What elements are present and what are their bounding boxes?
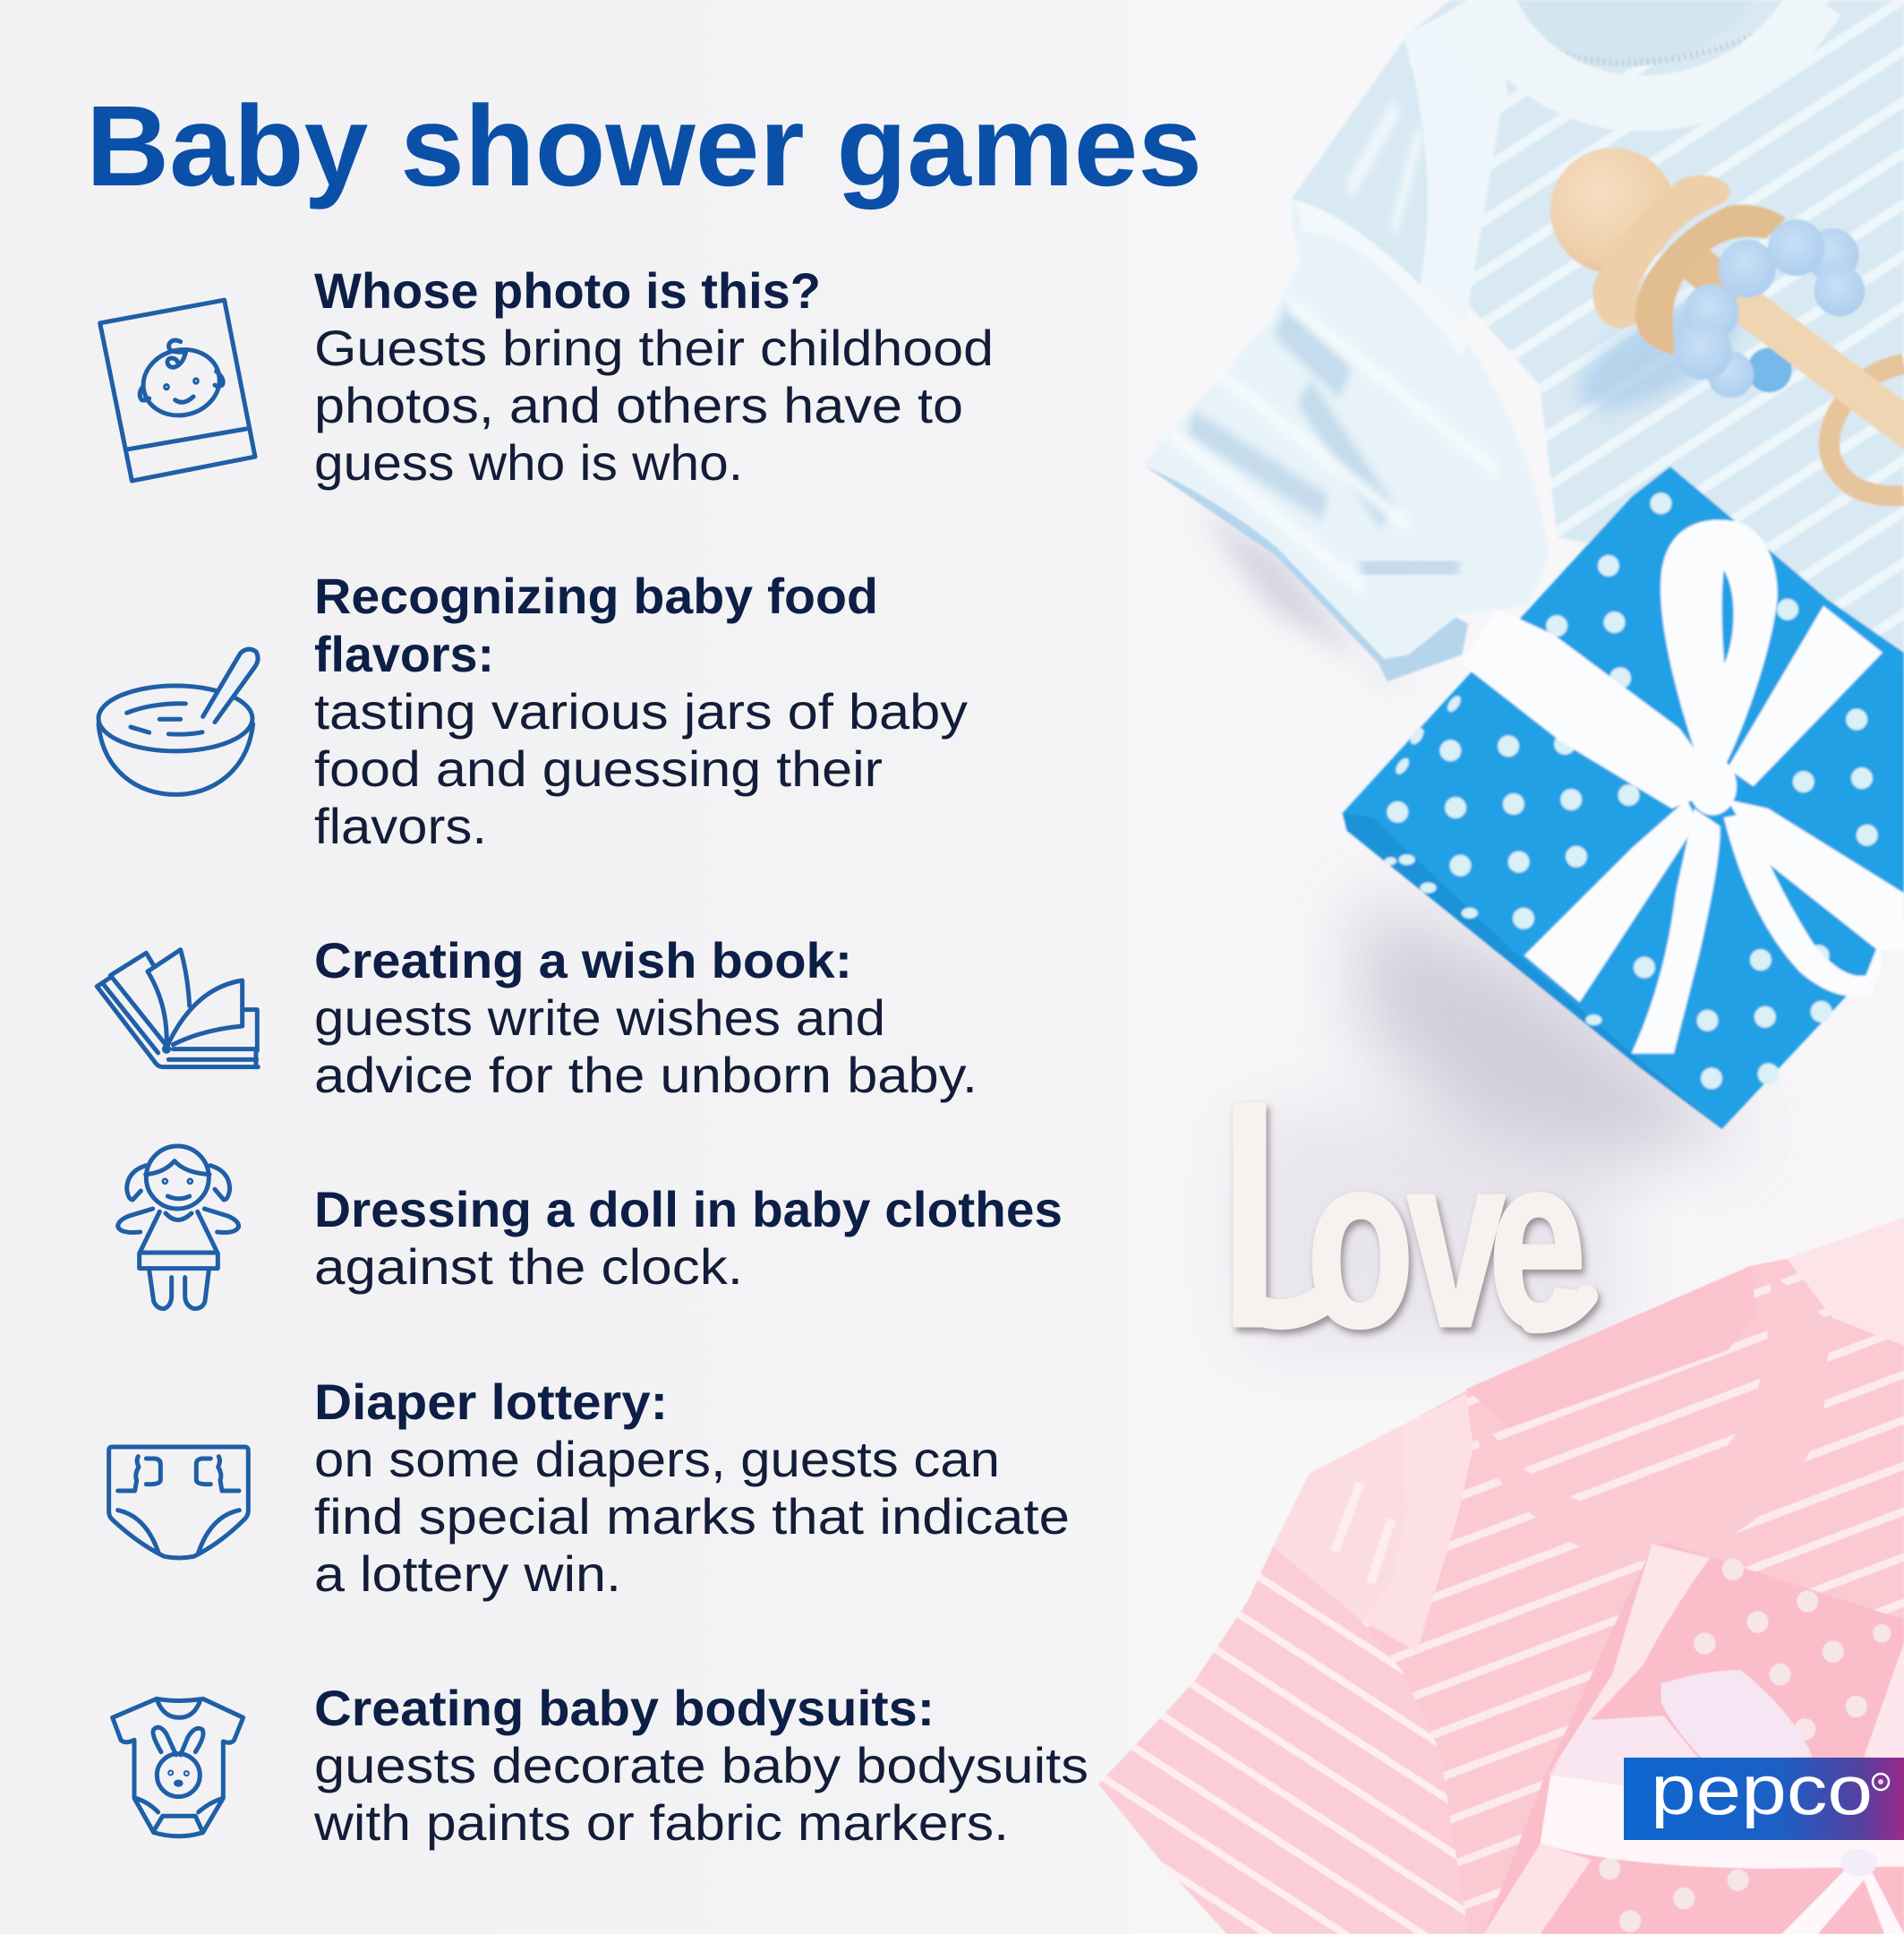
game 5 text bbox=[314, 1373, 1070, 1602]
game 3 text: guests write wishes and bbox=[314, 989, 885, 1046]
icon: baby photo bbox=[100, 300, 255, 481]
logo: pepco bbox=[1624, 1750, 1904, 1840]
game 1 text: guess who is who. bbox=[314, 434, 743, 491]
wooden love cut-out: v bbox=[1407, 1105, 1505, 1378]
icon: diaper bbox=[109, 1447, 248, 1558]
blue sleeve bbox=[1143, 18, 1549, 681]
game 5 text: a lottery win. bbox=[314, 1545, 621, 1602]
game 6 text: guests decorate baby bodysuits bbox=[314, 1737, 1089, 1793]
game 5 text: find special marks that indicate bbox=[314, 1488, 1070, 1545]
game 2 text bbox=[314, 568, 968, 854]
gift shadow bbox=[1361, 895, 1746, 1155]
soft shade behind love bbox=[1244, 1110, 1620, 1352]
game 1 text: photos, and others have to bbox=[314, 377, 963, 433]
game 3 text: advice for the unborn baby. bbox=[314, 1047, 978, 1103]
icon: doll bbox=[118, 1146, 239, 1309]
icon: bowl with spoon bbox=[98, 649, 258, 794]
wooden rattle bbox=[1550, 148, 1904, 496]
blue polka dot gift bbox=[1343, 466, 1904, 1129]
photo: blue bodysuit, rattle and gift bbox=[1143, 0, 1904, 1155]
blue bodysuit body bbox=[1404, 0, 1904, 698]
wooden love cut-out: l bbox=[1219, 1049, 1280, 1390]
game 6 text bbox=[313, 1680, 1089, 1851]
wooden love cut-out bbox=[1219, 1049, 1586, 1390]
game 4 text: Dressing a doll in baby clothes bbox=[314, 1181, 1063, 1237]
sleeve shadow bbox=[1200, 510, 1432, 689]
game 2 text: Recognizing baby food bbox=[314, 568, 878, 624]
game 1 text: Whose photo is this? bbox=[314, 262, 821, 319]
game 5 text: Diaper lottery: bbox=[314, 1373, 668, 1430]
game 1 text bbox=[314, 262, 994, 491]
game 6 text: Creating baby bodysuits: bbox=[314, 1680, 935, 1736]
game 4 text: against the clock. bbox=[314, 1238, 743, 1295]
game 3 text: Creating a wish book: bbox=[314, 932, 852, 988]
game 2 text: tasting various jars of baby bbox=[314, 683, 968, 740]
logo: pepco: pepco bbox=[1651, 1750, 1873, 1829]
game 4 text bbox=[314, 1181, 1063, 1295]
white ribbon and bow bbox=[1462, 520, 1904, 1054]
icon: open book bbox=[97, 950, 258, 1067]
icon: bodysuit with bunny bbox=[113, 1699, 243, 1836]
game 3 text bbox=[314, 932, 978, 1103]
wooden love cut-out: e bbox=[1489, 1105, 1586, 1378]
game 2 text: flavors: bbox=[314, 626, 494, 682]
pink bodysuit bbox=[1098, 1218, 1904, 1934]
game 6 text: with paints or fabric markers. bbox=[313, 1794, 1009, 1851]
wooden love cut-out: o bbox=[1307, 1105, 1414, 1378]
photo: pink bodysuit and gift bbox=[1098, 1218, 1904, 1934]
game 2 text: food and guessing their bbox=[314, 740, 883, 797]
game 2 text: flavors. bbox=[314, 798, 487, 854]
game 5 text: on some diapers, guests can bbox=[314, 1431, 1000, 1487]
title: Baby shower games bbox=[86, 82, 1202, 210]
game 1 text: Guests bring their childhood bbox=[314, 320, 994, 376]
pink polka dot gift bbox=[1484, 1542, 1904, 1934]
